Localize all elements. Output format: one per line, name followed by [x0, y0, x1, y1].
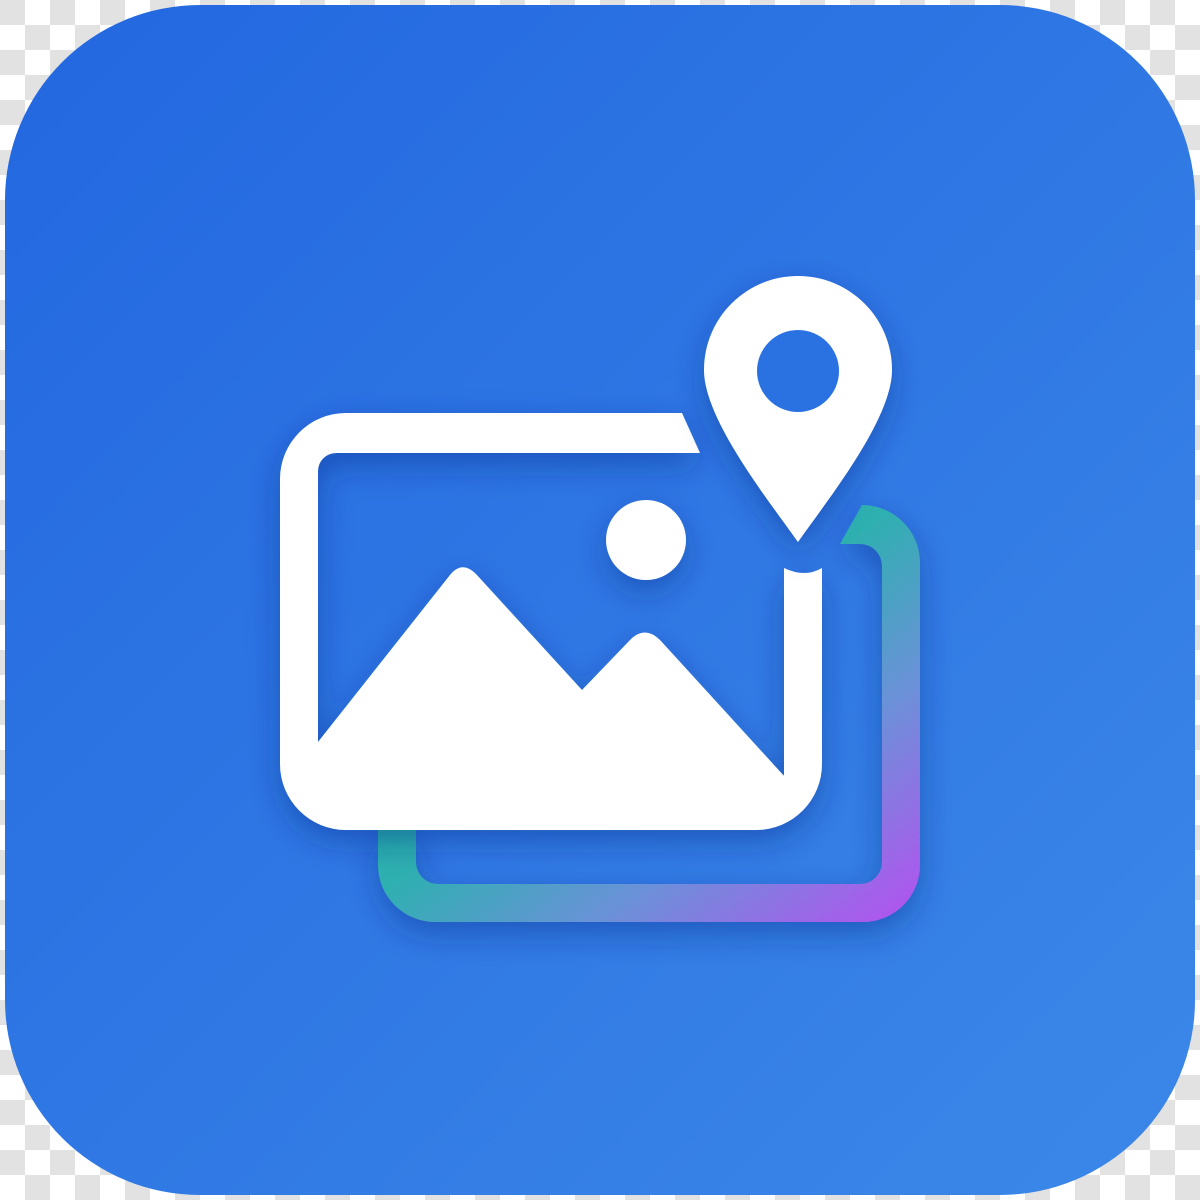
icon: back gradient frame: [378, 505, 920, 922]
icon: mountains: [318, 567, 785, 792]
icon: location pin: [704, 276, 892, 542]
icon: sun: [606, 500, 686, 580]
icon: white photo frame: [280, 413, 822, 830]
